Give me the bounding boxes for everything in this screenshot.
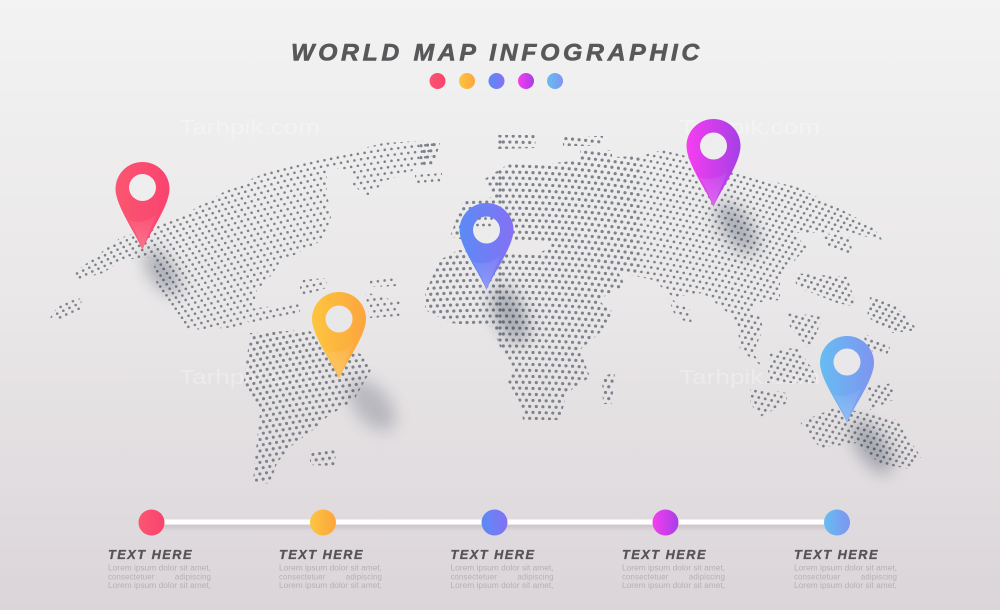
watermarks [179, 117, 820, 389]
pin: light blue [820, 336, 874, 423]
text block 3 [450, 547, 554, 590]
map: North America [50, 140, 442, 330]
text block 3: consectetuer adipiscing [450, 572, 554, 582]
watermarks: Tarhpik.com [179, 117, 320, 139]
watermarks: Tarhpik.com [679, 367, 820, 389]
text block 3: Lorem ipsum dolor sit amet, [450, 564, 554, 572]
text block 4: Lorem ipsum dolor sit amet, [622, 564, 725, 572]
map: Africa and Europe [420, 135, 640, 420]
pin: red [116, 162, 170, 250]
text block 5: consectetuer adipiscing [794, 572, 897, 582]
timeline marker: red [138, 510, 164, 536]
text block 2 [279, 547, 382, 590]
text block 4: consectetuer adipiscing [622, 572, 725, 582]
text block 4: Lorem ipsum dolor sit amet, [622, 581, 725, 590]
title colour dots [430, 73, 563, 89]
map: South America [244, 330, 371, 484]
text block 1: Lorem ipsum dolor sit amet, [108, 564, 211, 572]
watermarks: Tarhpik.com [179, 367, 320, 389]
text block 2: consectetuer adipiscing [279, 572, 382, 582]
timeline marker: blue [482, 510, 508, 536]
text block 1: consectetuer adipiscing [108, 572, 211, 582]
text block 2: Lorem ipsum dolor sit amet, [279, 581, 382, 590]
pin: blue [460, 203, 514, 290]
text block 4: TEXT HERE [622, 547, 707, 562]
text block 2: Lorem ipsum dolor sit amet, [279, 564, 382, 572]
timeline [138, 510, 850, 536]
text block 3: Lorem ipsum dolor sit amet, [450, 581, 554, 590]
pin: orange [312, 292, 366, 379]
text block 1: Lorem ipsum dolor sit amet, [108, 581, 211, 590]
text block 4 [622, 547, 725, 590]
text block 1: TEXT HERE [108, 547, 193, 562]
text block 5: TEXT HERE [794, 547, 879, 562]
timeline marker: orange [310, 510, 336, 536]
dotted world map [50, 135, 921, 484]
text block 3: TEXT HERE [450, 547, 536, 562]
pin: magenta [686, 119, 740, 207]
title: WORLD MAP INFOGRAPHIC [291, 40, 703, 66]
watermarks: Tarhpik.com [679, 117, 820, 139]
timeline marker: light blue [824, 510, 850, 536]
text block 5 [794, 547, 897, 590]
text block 5: Lorem ipsum dolor sit amet, [794, 581, 897, 590]
map: East Asia, islands and Australia [737, 273, 921, 468]
map: Asia [640, 150, 882, 340]
timeline marker: magenta [652, 510, 678, 536]
pin shadows [137, 195, 901, 480]
text block 2: TEXT HERE [279, 547, 364, 562]
text block 1 [108, 547, 211, 590]
text block 5: Lorem ipsum dolor sit amet, [794, 564, 897, 572]
